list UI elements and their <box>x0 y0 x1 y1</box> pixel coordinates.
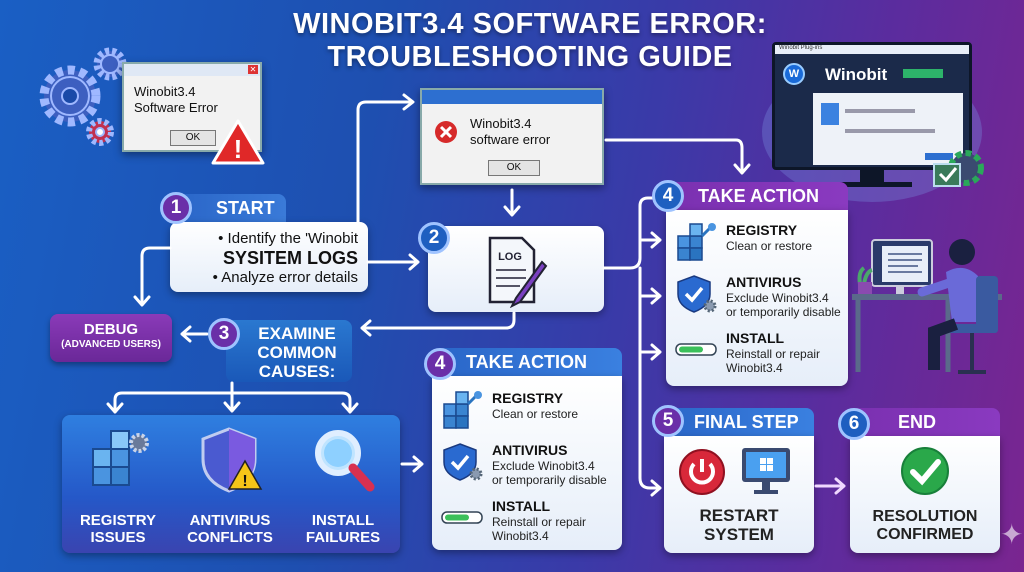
decorative sparkle: ✦ <box>1000 519 1023 550</box>
step 6: end: CONFIRMED <box>877 526 973 543</box>
action: antivirus: or temporarily disable <box>492 473 607 487</box>
step 2: log: LOG <box>498 251 522 263</box>
debug box: (ADVANCED USERS) <box>61 339 161 350</box>
cause: antivirus conflicts: CONFLICTS <box>187 529 273 546</box>
action: antivirus: Exclude Winobit3.4 <box>492 459 595 473</box>
step 6: end: END <box>898 412 936 432</box>
action: registry: Clean or restore <box>492 407 578 421</box>
debug box <box>50 314 172 362</box>
action: registry <box>443 390 578 429</box>
dialog: center error <box>420 88 604 185</box>
right monitor: Winobit window: W <box>789 68 799 80</box>
step 3: examine causes: COMMON <box>257 343 337 362</box>
step 1: start: SYSITEM LOGS <box>223 248 358 268</box>
step 5: final step: SYSTEM <box>704 525 774 544</box>
icon: power button <box>679 449 725 495</box>
right monitor: Winobit window <box>762 42 984 202</box>
dialog: top-left error: Software Error <box>134 100 218 115</box>
action: antivirus <box>677 274 841 319</box>
action: antivirus: ANTIVIRUS <box>492 442 567 458</box>
cause: registry issues: ISSUES <box>90 529 146 546</box>
step 5: final step: RESTART <box>699 506 778 525</box>
step 3: examine causes: CAUSES: <box>259 362 335 381</box>
action: install: INSTALL <box>726 330 784 346</box>
cause: registry issues: REGISTRY <box>80 512 156 529</box>
action: install <box>675 330 820 375</box>
icon: windows monitor <box>742 448 790 494</box>
step 6: end: 6 <box>849 413 859 434</box>
step 3: examine causes: EXAMINE <box>258 324 336 343</box>
dialog: center error: Winobit3.4 <box>470 116 531 131</box>
step 2: log <box>418 222 608 320</box>
action: install: INSTALL <box>492 498 550 514</box>
icon: warning triangle: ! <box>234 134 242 164</box>
step 4: take action (middle): 4 <box>435 353 445 374</box>
action: antivirus <box>443 442 607 487</box>
action: install: Reinstall or repair <box>492 515 586 529</box>
step 5: final step <box>652 405 818 560</box>
step 6: end: RESOLUTION <box>873 508 977 525</box>
step 3: examine causes: 3 <box>219 323 229 344</box>
cause: registry issues <box>80 430 156 546</box>
action: registry <box>677 222 812 261</box>
action: install: Winobit3.4 <box>726 361 783 375</box>
action: registry: REGISTRY <box>492 390 563 406</box>
action: install: Winobit3.4 <box>492 529 549 543</box>
cause: install failures: INSTALL <box>312 512 374 529</box>
step 4: take action (right): 4 <box>663 185 673 206</box>
right monitor: Winobit window: Winobit Plug-ins <box>779 45 822 51</box>
step 5: final step: FINAL STEP <box>694 412 799 432</box>
title <box>292 8 767 73</box>
cause: install failures <box>306 430 380 546</box>
action: registry: REGISTRY <box>726 222 797 238</box>
step 1: start <box>160 192 372 300</box>
dialog: top-left error <box>122 62 262 152</box>
right monitor: Winobit window: Winobit <box>825 65 887 84</box>
action: antivirus: ANTIVIRUS <box>726 274 801 290</box>
step 1: start: • Analyze error details <box>213 269 358 286</box>
cause: antivirus conflicts: ANTIVIRUS <box>190 512 270 529</box>
step 4: take action (middle): TAKE ACTION <box>466 352 587 372</box>
step 3: examine causes <box>208 318 352 382</box>
dialog: top-left error: Winobit3.4 <box>134 84 195 99</box>
step 4: take action (right): TAKE ACTION <box>698 186 819 206</box>
step 1: start: START <box>216 198 275 218</box>
icon: warning triangle <box>212 120 265 164</box>
step 2: log: 2 <box>429 227 439 248</box>
debug box: DEBUG <box>84 321 138 338</box>
cause: antivirus conflicts <box>187 427 273 546</box>
action: install: Reinstall or repair <box>726 347 820 361</box>
dialog: center error: software error <box>470 132 550 147</box>
step 4: take action (right) <box>652 180 852 393</box>
cause: install failures: FAILURES <box>306 529 380 546</box>
icon: gears top-left <box>40 48 126 146</box>
title: TROUBLESHOOTING GUIDE <box>327 41 733 73</box>
panel: common causes <box>62 415 400 553</box>
step 4: take action (middle) <box>424 348 626 558</box>
dialog: top-left error: ✕ <box>250 65 256 74</box>
action: antivirus: Exclude Winobit3.4 <box>726 291 829 305</box>
step 1: start: 1 <box>171 197 181 218</box>
dialog: center error: OK <box>507 162 521 173</box>
title: WINOBIT3.4 SOFTWARE ERROR: <box>293 8 767 40</box>
action: install <box>441 498 586 543</box>
step 6: end <box>838 408 1004 560</box>
dialog: top-left error: OK <box>186 132 200 143</box>
icon: green check <box>901 447 949 495</box>
step 1: start: • Identify the 'Winobit <box>218 230 358 247</box>
cause: antivirus conflicts: ! <box>242 473 248 490</box>
step 5: final step: 5 <box>663 410 673 431</box>
action: registry: Clean or restore <box>726 239 812 253</box>
illustration: person at desk <box>852 239 1002 374</box>
action: antivirus: or temporarily disable <box>726 305 841 319</box>
